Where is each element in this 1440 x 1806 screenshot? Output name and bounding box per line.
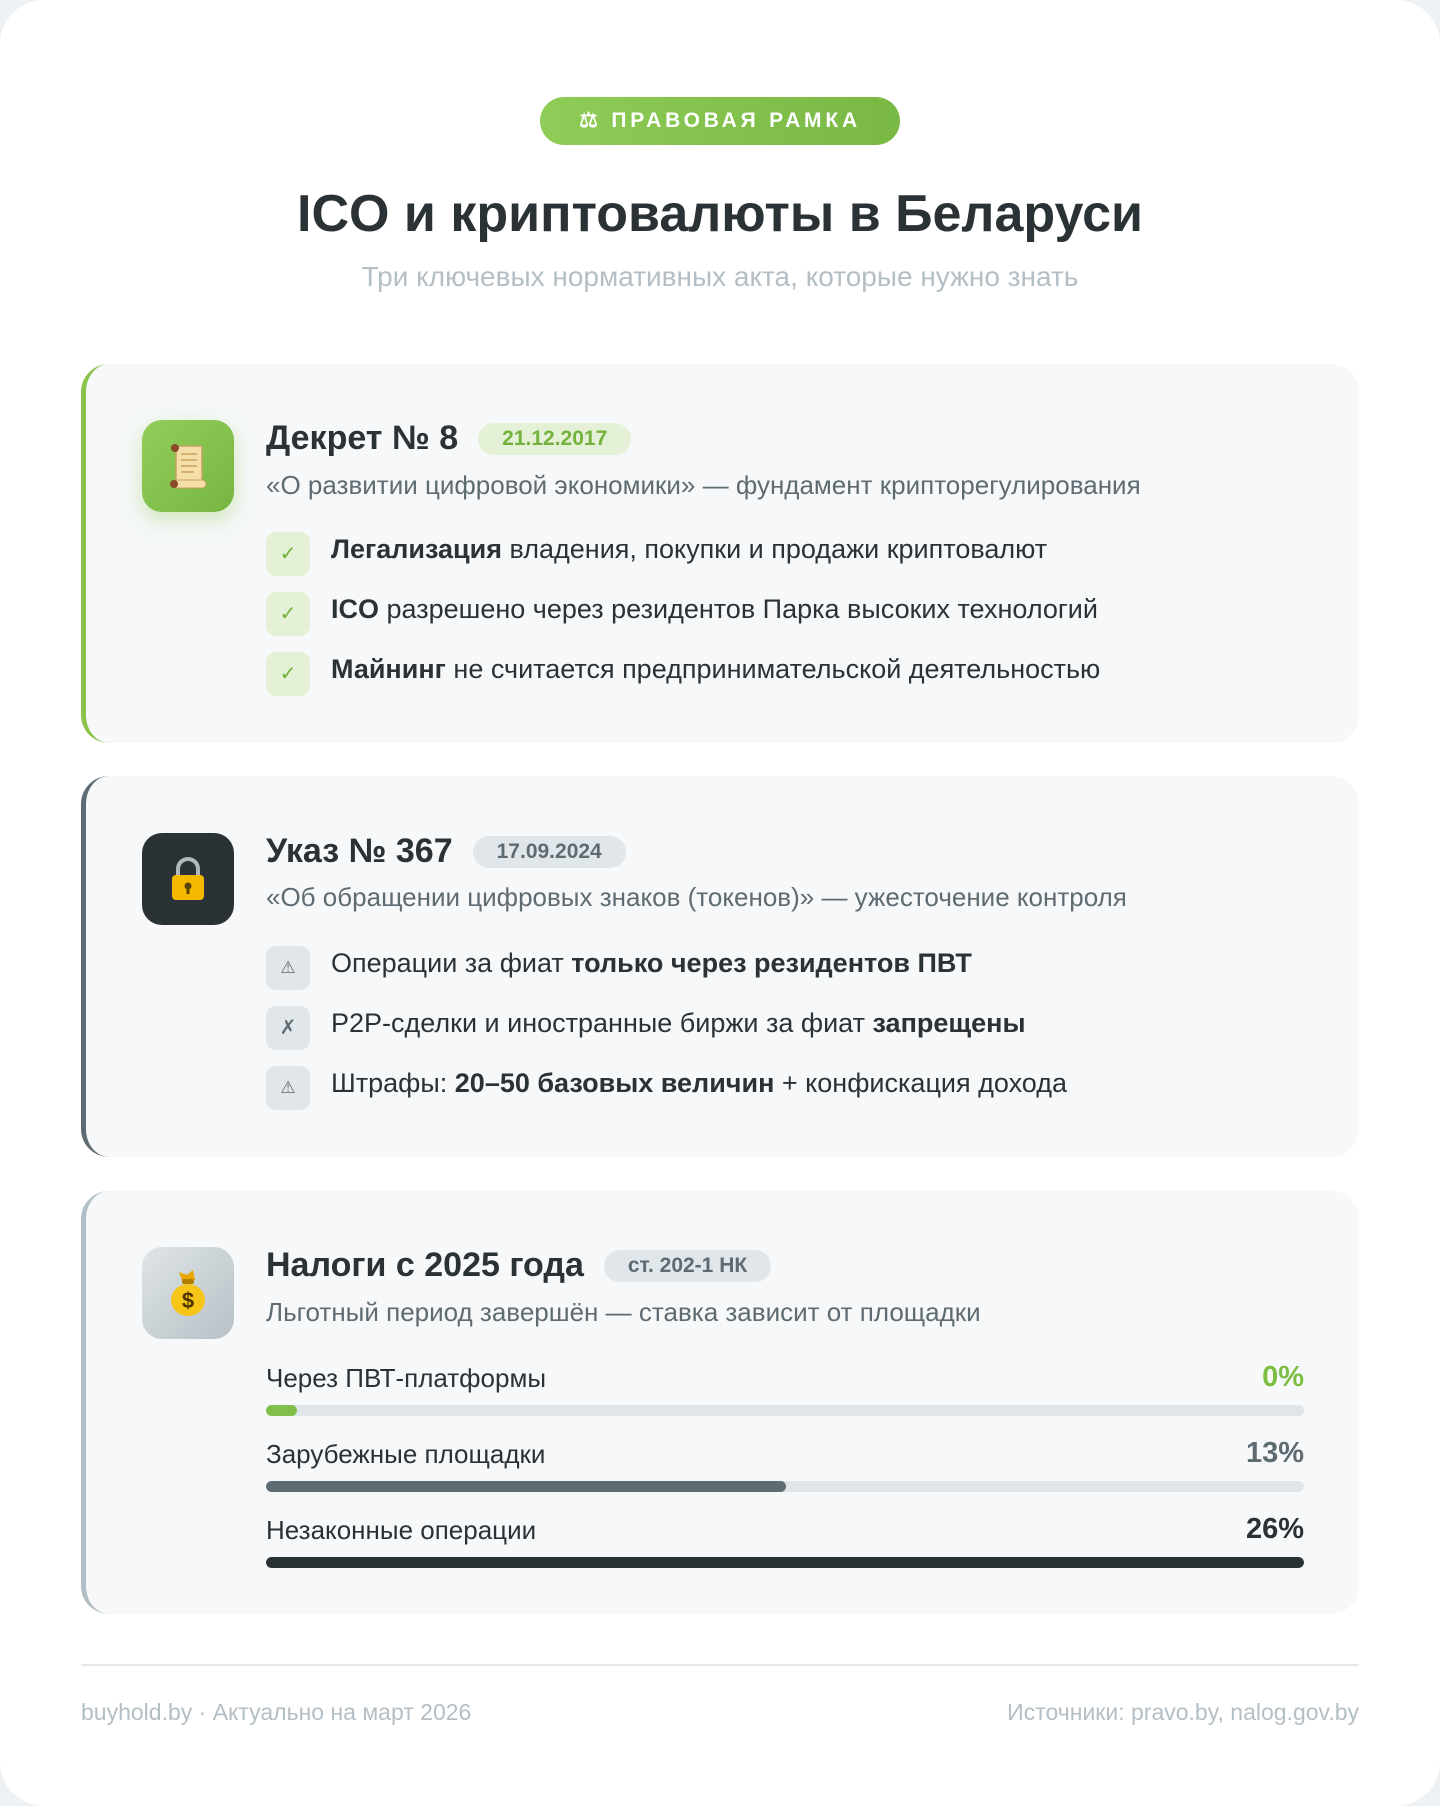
subtitle: Три ключевых нормативных акта, которые нужно знать [362, 261, 1078, 292]
title: ICO и криптовалюты в Беларуси [297, 185, 1143, 243]
bullet: P2P [266, 1006, 1026, 1050]
heading with date: 17.09.2024 [497, 840, 602, 862]
panel: Указ № 367: Операции за фиат только через резидентов ПВТ [331, 948, 972, 978]
heading with date [266, 419, 631, 457]
panel: Указ № 367: ⚠ [280, 1078, 296, 1097]
heading with date [266, 832, 626, 870]
description: «Об обращении цифровых знаков (токенов)» — ужесточение контроля [266, 882, 1127, 912]
panel: Декрет № 8: Легализация владения, покупки и продажи криптовалют [331, 534, 1047, 564]
panel: Декрет № 8 [81, 364, 1359, 743]
row: незаконные: Незаконные операции [266, 1515, 536, 1545]
heading with article: Налоги с 2025 года [266, 1246, 584, 1284]
panel: Указ № 367: ⚠ [280, 958, 296, 977]
panel: Декрет № 8: ✓ [280, 663, 296, 685]
bullet: майнинг [266, 652, 1100, 696]
description: «О развитии цифровой экономики» — фундамент крипторегулирования [266, 470, 1141, 500]
row: ПВТ: 0% [1262, 1361, 1304, 1393]
row: зарубежные [266, 1437, 1304, 1492]
panel: Декрет № 8: ICO разрешено через резидентов Парка высоких технологий [331, 594, 1098, 624]
panel: Указ № 367 [81, 776, 1359, 1157]
panel: Указ № 367: ✗ [280, 1017, 296, 1039]
description: Льготный период завершён — ставка зависит от площадки [266, 1297, 981, 1327]
panel: Декрет № 8: ✓ [280, 603, 296, 625]
row: незаконные: 26% [1246, 1513, 1304, 1545]
footer right: Источники: pravo.by, nalog.gov.by [1007, 1699, 1359, 1725]
panel: Декрет № 8: Майнинг не считается предпринимательской деятельностью [331, 654, 1100, 684]
icon: lock [142, 833, 234, 925]
heading with article: ст. 202-1 НК [628, 1254, 747, 1276]
badge: ПРАВОВАЯ РАМКА [540, 97, 900, 145]
bullet: фиат [266, 946, 972, 990]
footer left: buyhold.by · Актуально на март 2026 [81, 1699, 471, 1725]
heading with date: Указ № 367 [266, 832, 453, 870]
row: ПВТ [266, 1361, 1304, 1416]
bullet: легализация [266, 532, 1047, 576]
panel: Указ № 367: P2P-сделки и иностранные биржи за фиат запрещены [331, 1008, 1026, 1038]
row: зарубежные: 13% [1246, 1437, 1304, 1469]
icon: money bag [142, 1247, 234, 1339]
bullet: штрафы [266, 1066, 1067, 1110]
badge: ПРАВОВАЯ РАМКА: ⚖ ПРАВОВАЯ РАМКА [579, 109, 861, 132]
row: ПВТ: Через ПВТ-платформы [266, 1363, 546, 1393]
bullet: ICO [266, 592, 1098, 636]
row: зарубежные: Зарубежные площадки [266, 1439, 545, 1469]
bar chart: tax rates [266, 1361, 1304, 1568]
icon: money bag: $ [182, 1288, 194, 1313]
icon: scroll [142, 420, 234, 512]
heading with date: 21.12.2017 [502, 426, 607, 450]
panel: Налоги с 2025 года [81, 1191, 1359, 1614]
row: незаконные [266, 1513, 1304, 1568]
heading with article [266, 1246, 771, 1284]
heading with date: Декрет № 8 [266, 419, 458, 457]
panel: Указ № 367: Штрафы: 20–50 базовых величин + конфискация дохода [331, 1068, 1067, 1098]
panel: Декрет № 8: ✓ [280, 543, 296, 565]
